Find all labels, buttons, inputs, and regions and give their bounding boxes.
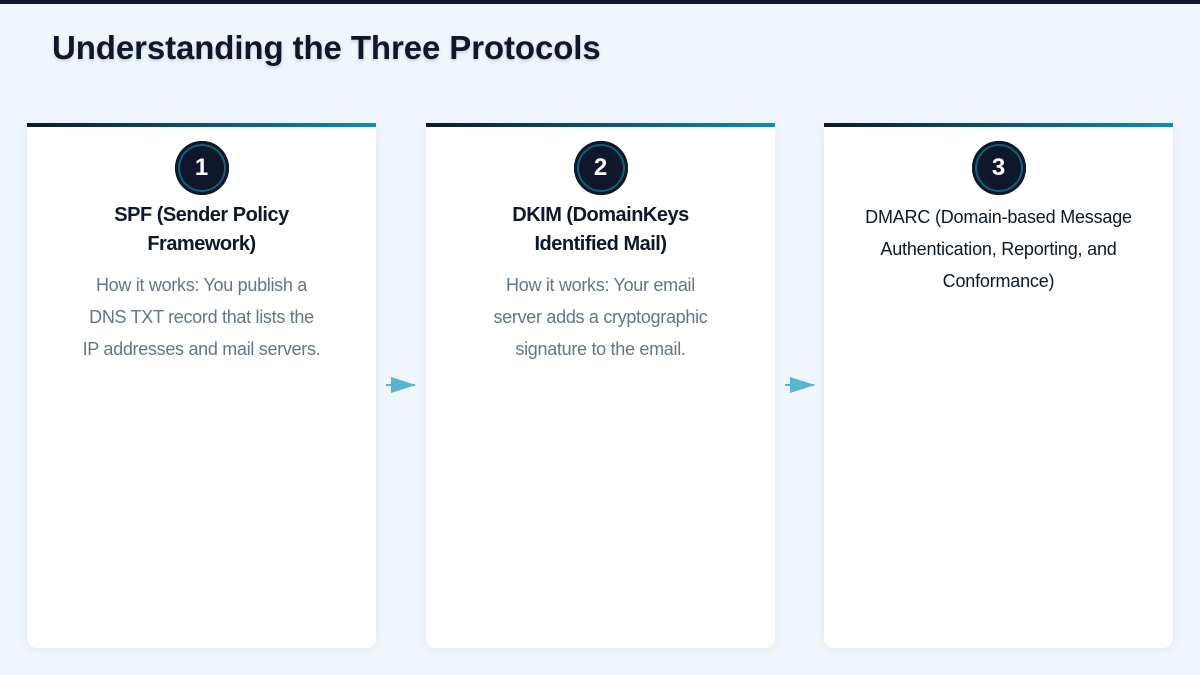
heading: DMARC: DMARC (Domain-based Message	[865, 207, 1132, 227]
heading: SPF: SPF (Sender Policy Framework)	[114, 204, 289, 255]
icon: number 3: 3	[992, 154, 1005, 181]
icon: number 1: 1	[195, 154, 208, 181]
text: SPF description: IP addresses and mail servers.	[83, 339, 320, 359]
heading: DMARC: Conformance)	[943, 271, 1054, 291]
icon: number 2	[574, 141, 628, 195]
panel: DMARC	[824, 123, 1173, 648]
heading: DMARC	[865, 207, 1132, 291]
arrow 2	[785, 377, 815, 393]
text: DKIM description: server adds a cryptographic	[493, 307, 708, 327]
text: DKIM description: How it works: Your email	[506, 275, 695, 295]
text: SPF description: How it works: You publish a	[96, 275, 307, 295]
heading: DKIM: DKIM (DomainKeys Identified Mail)	[512, 204, 689, 255]
text: SPF description	[83, 275, 320, 359]
title: Understanding the Three Protocols	[52, 29, 601, 66]
panel: SPF	[27, 123, 376, 648]
text: DKIM description	[493, 275, 708, 359]
panel: DKIM	[426, 123, 775, 648]
icon: number 1	[174, 141, 228, 195]
text: SPF description: DNS TXT record that lists the	[89, 307, 314, 327]
icon: number 2: 2	[594, 154, 607, 181]
icon: number 3	[972, 141, 1026, 195]
text: DKIM description: signature to the email.	[515, 339, 686, 359]
heading: DMARC: Authentication, Reporting, and	[880, 239, 1117, 259]
arrow 1	[386, 377, 416, 393]
